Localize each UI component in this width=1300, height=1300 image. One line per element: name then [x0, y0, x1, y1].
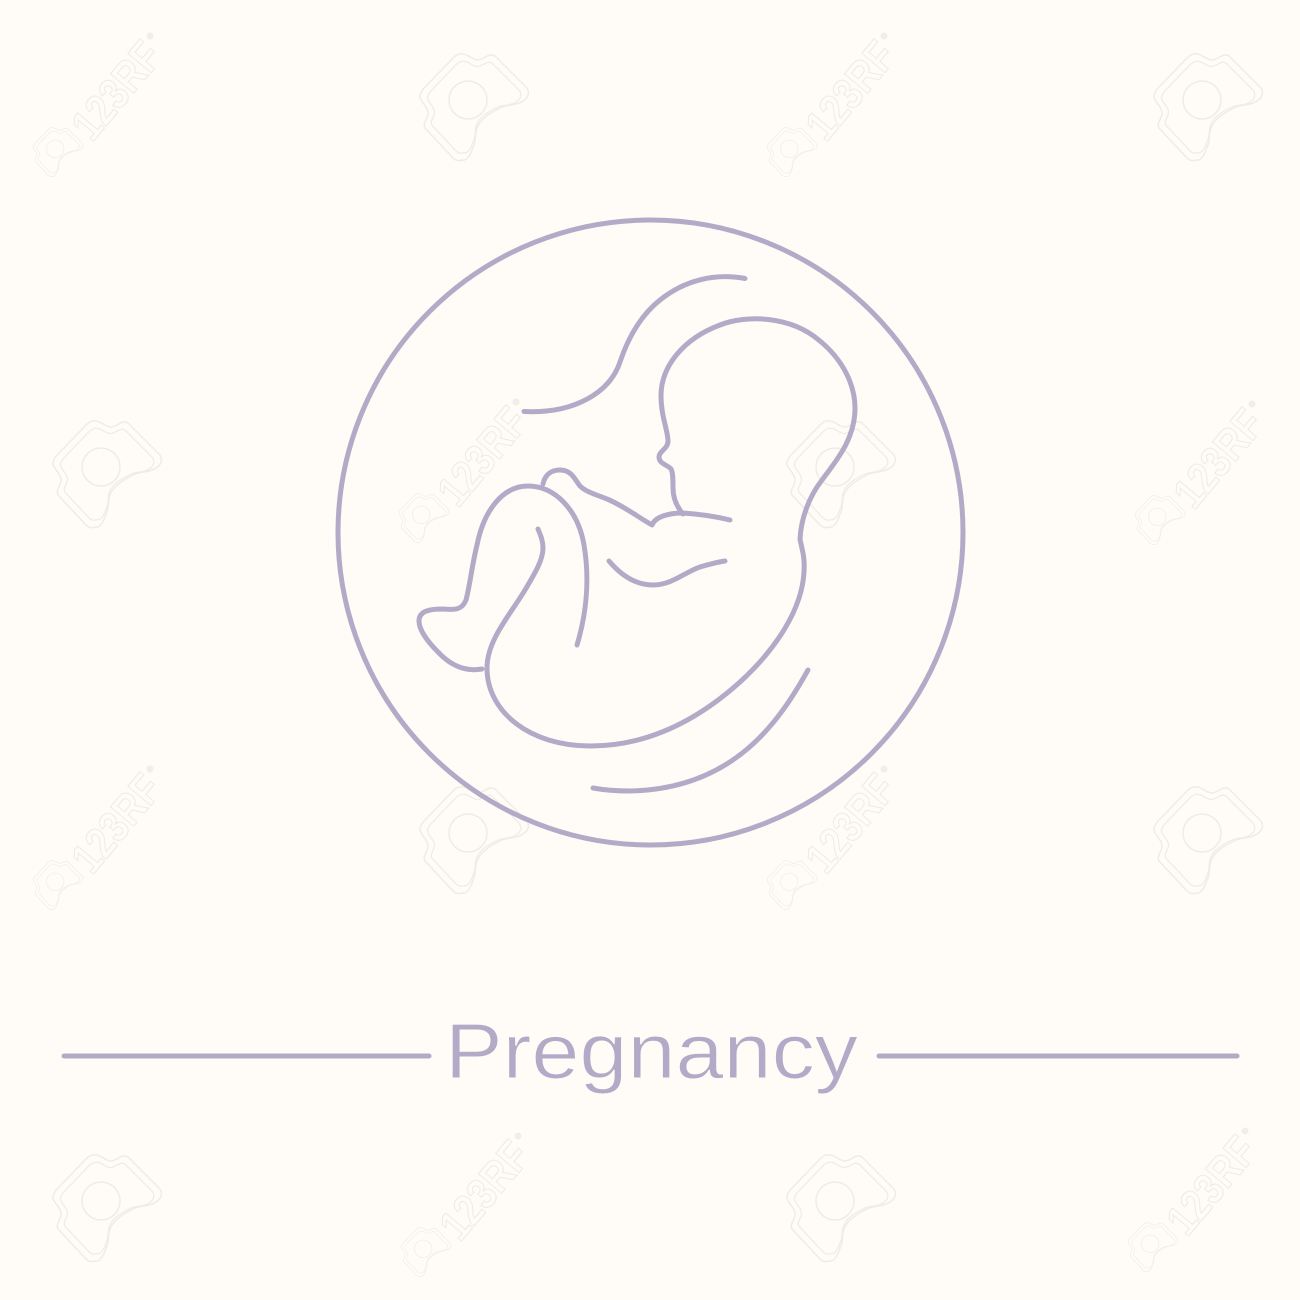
watermarks: 123RF — [62, 32, 172, 149]
right divider line — [879, 1054, 1237, 1058]
womb curve bottom — [593, 670, 808, 791]
leg and foot — [419, 486, 587, 670]
watermarks: 123RF — [796, 765, 906, 882]
icon: fetus in circle — [338, 220, 963, 845]
head and body outline — [487, 319, 855, 746]
watermarks: 123RF — [796, 32, 906, 149]
title: Pregnancy — [445, 1007, 858, 1095]
watermarks: 123RF — [1164, 400, 1274, 517]
womb curve top — [524, 277, 745, 412]
arm and chin line — [543, 470, 730, 525]
watermarks: 123RF — [1157, 1127, 1267, 1244]
watermarks: 123RF — [428, 398, 538, 515]
circle outline — [338, 220, 963, 845]
left divider line — [64, 1054, 429, 1058]
watermarks: 123RF — [430, 1132, 540, 1249]
chest fold — [609, 561, 725, 585]
watermarks: 123RF — [62, 765, 172, 882]
